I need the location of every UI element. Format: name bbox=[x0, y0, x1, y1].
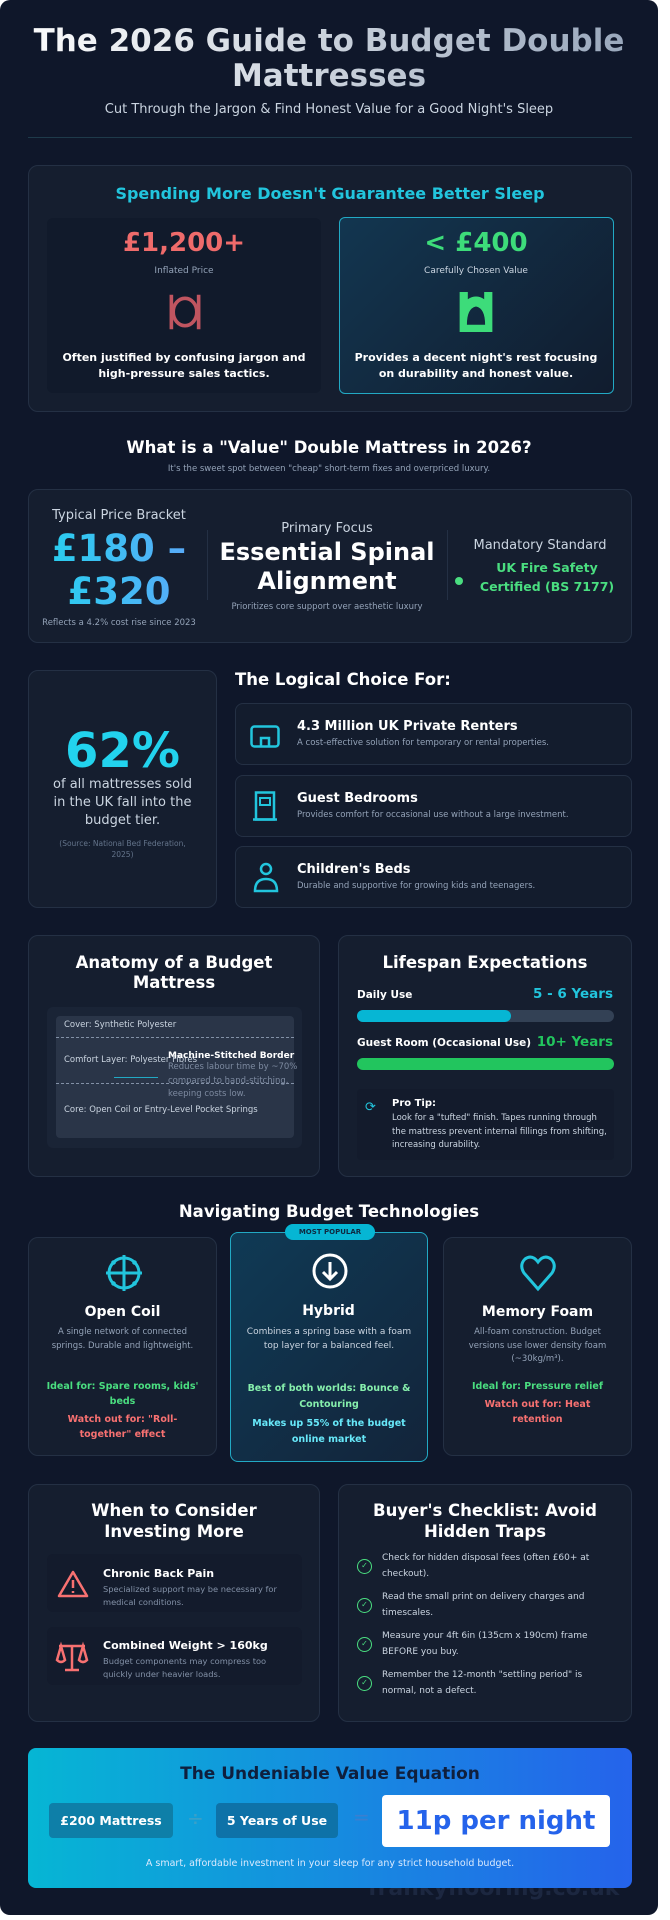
diagram: layers: Cover: Synthetic Polyester bbox=[64, 1020, 176, 1030]
card: guest bbox=[235, 775, 632, 837]
title: Mattresses bbox=[232, 58, 426, 94]
card: hybrid: Best of both worlds: Bounce & Contouring bbox=[248, 1383, 410, 1410]
heading: value mattress: What is a "Value" Double Mattress in 2026? bbox=[126, 438, 532, 457]
panel: anatomy: Anatomy of a Budget bbox=[76, 953, 272, 972]
callout: pro tip: ⟳ bbox=[365, 1100, 376, 1115]
card: memory foam: Ideal for: Pressure relief bbox=[472, 1381, 603, 1392]
equation bbox=[49, 1803, 173, 1838]
panel: 62% stat: budget tier. bbox=[85, 813, 160, 828]
panel: spending comparison bbox=[28, 165, 632, 412]
panel: value definition bbox=[28, 489, 632, 643]
diagram: layers: Comfort Layer: Polyester Fibres bbox=[64, 1055, 197, 1065]
primary focus: Alignment bbox=[257, 567, 397, 595]
panel: 62% stat: of all mattresses sold bbox=[53, 777, 192, 792]
card: open coil: Watch out for: "Roll-together" effect bbox=[68, 1414, 177, 1440]
mandatory standard bbox=[473, 538, 614, 594]
card: guest: Guest Bedrooms bbox=[297, 791, 418, 806]
price bracket: Reflects a 4.2% cost rise since 2023 bbox=[42, 618, 196, 628]
card: hybrid: Makes up 55% of the budget online market bbox=[252, 1418, 406, 1445]
card: inflated: high-pressure sales tactics. bbox=[98, 367, 270, 380]
price bracket: Typical Price Bracket bbox=[52, 508, 186, 523]
card: value: Provides a decent night's rest focusing bbox=[355, 351, 597, 364]
primary focus bbox=[219, 521, 434, 612]
card: value: < £400 bbox=[424, 228, 528, 258]
checklist items: Check for hidden disposal fees (often £60+ at checkout). bbox=[382, 1553, 589, 1578]
panel: value equation bbox=[28, 1748, 632, 1888]
item: back pain bbox=[47, 1554, 302, 1612]
title: The 2026 Guide to Budget Double bbox=[34, 23, 624, 59]
checklist items: Remember the 12-month "settling period" is normal, not a defect. bbox=[382, 1670, 582, 1696]
subtitle: Cut Through the Jargon & Find Honest Value for a Good Night's Sleep bbox=[105, 102, 553, 117]
checklist items: ✓ bbox=[361, 1639, 368, 1648]
card: value: on durability and honest value. bbox=[379, 367, 573, 380]
panel: 62% stat: in the UK fall into the bbox=[54, 795, 191, 810]
equation: £200 Mattress bbox=[60, 1813, 162, 1828]
checklist items bbox=[357, 1553, 590, 1696]
diagram: layers: Core: Open Coil or Entry-Level Pocket Springs bbox=[64, 1105, 258, 1115]
card: inflated bbox=[47, 218, 321, 393]
mandatory standard: Mandatory Standard bbox=[473, 538, 606, 553]
icon: red frame bbox=[170, 294, 200, 330]
panel: investing more: Investing More bbox=[104, 1522, 244, 1541]
panel: investing more: When to Consider bbox=[91, 1501, 257, 1520]
callout: pro tip bbox=[357, 1089, 614, 1160]
panel: anatomy bbox=[28, 935, 320, 1177]
item: weight bbox=[47, 1627, 302, 1685]
item: back pain: Chronic Back Pain bbox=[103, 1567, 214, 1580]
card: hybrid: Combines a spring base with a foam top layer for a balanced feel. bbox=[247, 1327, 411, 1350]
panel: value equation: = bbox=[353, 1805, 370, 1829]
icon: arrow circle bbox=[312, 1254, 348, 1288]
primary focus: Essential Spinal bbox=[219, 538, 434, 566]
panel: buyer's checklist: Buyer's Checklist: Avoid bbox=[373, 1501, 597, 1520]
panel: buyer's checklist bbox=[338, 1484, 632, 1722]
heading: technologies: Navigating Budget Technologies bbox=[179, 1202, 479, 1221]
card: memory foam: All-foam construction. Budget versions use lower density foam (~30kg/m³). bbox=[469, 1327, 606, 1364]
panel: lifespan bbox=[338, 935, 632, 1177]
card: renters bbox=[235, 703, 632, 765]
item: weight: Budget components may compress too quickly under heavier loads. bbox=[103, 1656, 266, 1679]
heading: logical choice: The Logical Choice For: bbox=[235, 670, 451, 689]
diagram: layers: Machine-Stitched Border bbox=[168, 1051, 294, 1061]
bar: guest room: Guest Room (Occasional Use) bbox=[357, 1037, 531, 1049]
panel: value equation: A smart, affordable investment in your sleep for any strict household budget. bbox=[146, 1858, 514, 1869]
panel: value equation: 5 Years of Use bbox=[227, 1813, 327, 1828]
price bracket bbox=[42, 508, 196, 628]
card: value: Carefully Chosen Value bbox=[424, 266, 528, 276]
panel: lifespan: 5 - 6 Years bbox=[533, 986, 613, 1002]
panel: 62% stat: 62% bbox=[65, 723, 180, 779]
card: open coil: A single network of connected springs. Durable and lightweight. bbox=[52, 1327, 193, 1350]
card: open coil: Ideal for: Spare rooms, kids' beds bbox=[47, 1381, 198, 1407]
panel: value equation: The Undeniable Value Equation bbox=[180, 1764, 480, 1784]
card: inflated: Often justified by confusing jargon and bbox=[62, 351, 306, 364]
panel: buyer's checklist: Hidden Traps bbox=[424, 1522, 546, 1541]
heading: Spending More Doesn't Guarantee Better Sleep bbox=[115, 184, 545, 203]
card: children: Children's Beds bbox=[297, 862, 411, 877]
card: memory foam bbox=[443, 1237, 632, 1456]
diagram: layers: Reduces labour time by ~70% bbox=[168, 1062, 297, 1072]
card: renters: 4.3 Million UK Private Renters bbox=[297, 719, 518, 734]
callout: pro tip: Pro Tip: bbox=[392, 1098, 436, 1109]
card: memory foam: Memory Foam bbox=[482, 1304, 593, 1320]
panel: lifespan: Lifespan Expectations bbox=[383, 953, 587, 972]
diagram: layers bbox=[47, 1007, 302, 1148]
title bbox=[0, 24, 658, 94]
watermark: frankyflooring.co.uk bbox=[368, 1876, 619, 1901]
panel: 62% stat: (Source: National Bed Federation, bbox=[59, 839, 186, 848]
panel: value equation: ÷ bbox=[187, 1806, 204, 1830]
price bracket: £180 – bbox=[52, 527, 186, 570]
callout: stitched border bbox=[114, 1077, 158, 1078]
icon: check bbox=[455, 577, 463, 585]
card: open coil: Open Coil bbox=[85, 1304, 160, 1320]
badge bbox=[285, 1224, 375, 1240]
panel: anatomy: Mattress bbox=[133, 973, 215, 992]
card: open coil bbox=[28, 1237, 217, 1456]
card: children bbox=[235, 846, 632, 908]
item: back pain: Specialized support may be necessary for medical conditions. bbox=[103, 1584, 277, 1607]
panel: lifespan: 10+ Years bbox=[537, 1034, 613, 1050]
card: memory foam: Watch out for: Heat retention bbox=[485, 1399, 590, 1425]
primary focus: Prioritizes core support over aesthetic luxury bbox=[231, 602, 423, 612]
card: hybrid: Hybrid bbox=[302, 1303, 355, 1319]
mandatory standard: UK Fire Safety bbox=[496, 560, 598, 575]
checklist items: Measure your 4ft 6in (135cm x 190cm) frame BEFORE you buy. bbox=[382, 1631, 588, 1656]
checklist items: ✓ bbox=[361, 1561, 368, 1570]
badge: MOST POPULAR bbox=[299, 1228, 361, 1236]
card: guest: Provides comfort for occasional use without a large investment. bbox=[297, 810, 569, 820]
panel: 62% stat: 2025) bbox=[111, 850, 134, 859]
card: value bbox=[339, 217, 614, 394]
card: inflated: Inflated Price bbox=[154, 266, 214, 276]
card: inflated: £1,200+ bbox=[123, 228, 245, 258]
primary focus: Primary Focus bbox=[281, 521, 373, 536]
checklist items: Read the small print on delivery charges and timescales. bbox=[382, 1592, 584, 1618]
checklist items: ✓ bbox=[361, 1678, 368, 1687]
diagram: layers: keeping costs low. bbox=[168, 1089, 246, 1099]
icon: green frame bbox=[460, 292, 492, 332]
card: renters: A cost-effective solution for temporary or rental properties. bbox=[297, 738, 549, 748]
mandatory standard: Certified (BS 7177) bbox=[480, 579, 614, 594]
panel: 62% stat bbox=[28, 670, 217, 908]
price bracket: £320 bbox=[68, 570, 170, 613]
diagram: layers: compared to hand-stitching, bbox=[168, 1076, 288, 1086]
bar: daily use: Daily Use bbox=[357, 989, 412, 1001]
item: weight: Combined Weight > 160kg bbox=[103, 1639, 268, 1652]
card: children: Durable and supportive for growing kids and teenagers. bbox=[297, 881, 535, 891]
checklist items: ✓ bbox=[361, 1600, 368, 1609]
card: hybrid bbox=[230, 1232, 428, 1462]
subheading: It's the sweet spot between "cheap" short-term fixes and overpriced luxury. bbox=[168, 464, 490, 474]
callout: pro tip: Look for a "tufted" finish. Tapes running through the mattress prevent internal fillings from shifting, increasing durability. bbox=[392, 1113, 607, 1150]
panel: investing more bbox=[28, 1484, 320, 1722]
panel: value equation: 11p per night bbox=[397, 1806, 595, 1836]
